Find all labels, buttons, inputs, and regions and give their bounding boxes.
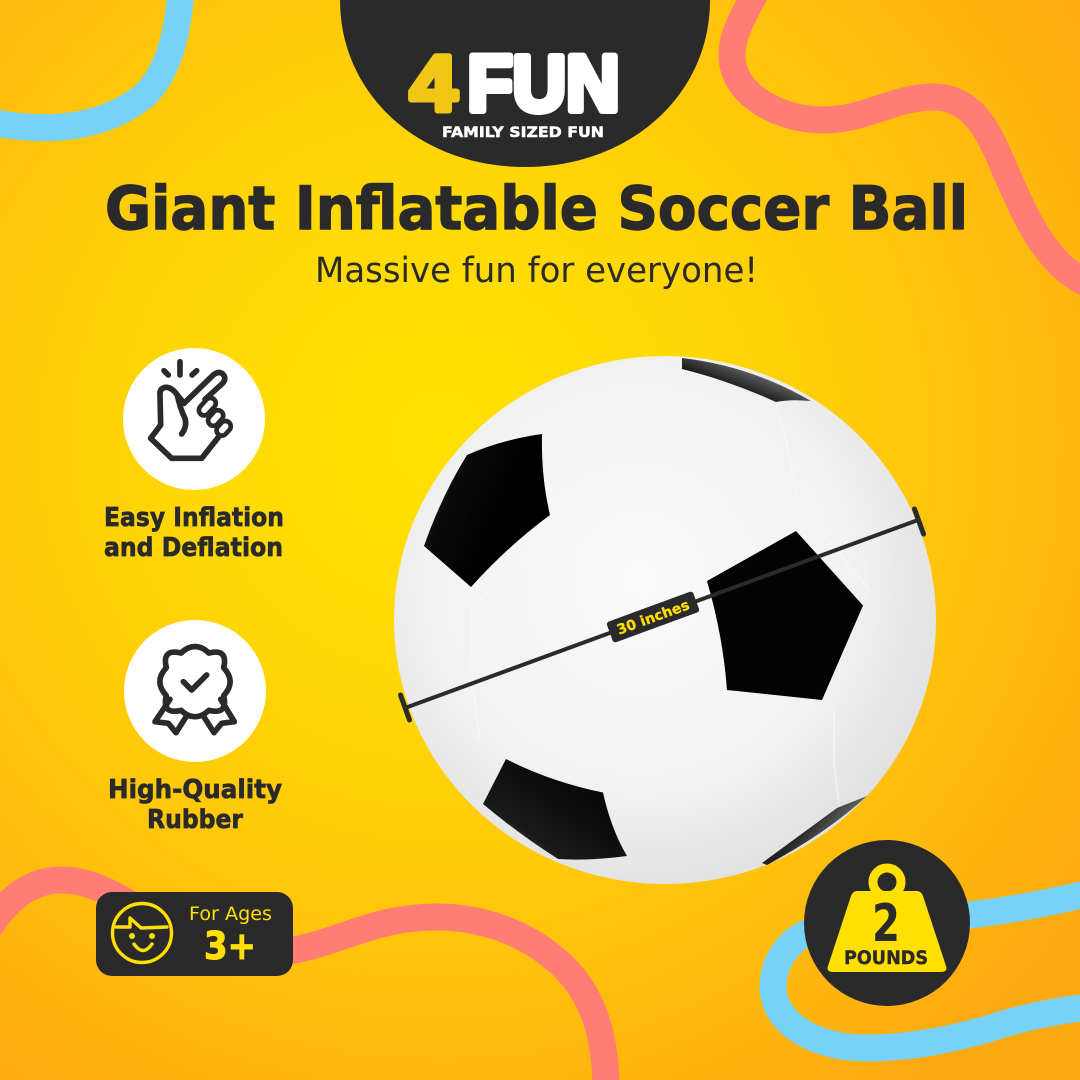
age text: For Ages [189,903,272,925]
ribbon: pink top right [732,0,1080,285]
measure label [606,591,700,643]
logo wordmark [410,38,620,128]
badge: weight [804,840,970,1006]
logo panel [340,0,710,167]
patch: right [707,531,863,700]
ribbon: blue bottom right [773,893,1080,1048]
patch: bottom [483,759,627,860]
weight unit: POUNDS [844,947,928,969]
ribbon: blue top left [0,0,181,128]
icon: snapping hand [123,348,265,490]
logo background [340,0,710,167]
panel seams [471,404,870,805]
icon: kid face [112,904,172,962]
measure label: 30 inches [615,597,692,639]
label: High-Quality [108,775,282,805]
label [104,503,284,563]
feature: easy inflation [104,348,284,563]
ball body [394,356,936,884]
icon: weight [828,868,946,972]
icon: award rosette [124,620,266,762]
badge: for ages: 3+ [204,924,256,968]
label: and Deflation [104,533,283,563]
logo tagline: FAMILY SIZED FUN [442,125,604,141]
patch: lower right [762,796,867,865]
label: Rubber [147,805,243,835]
feature: high quality [108,620,282,835]
label [108,775,282,835]
logo wordmark: 4 [410,38,457,128]
ribbon: pink bottom left [0,880,606,1080]
patch: top [682,358,811,402]
title: Giant Inflatable Soccer Ball [105,174,968,244]
subtitle: Massive fun for everyone! [315,251,758,291]
logo wordmark: FUN [468,38,620,128]
badge: for ages [96,892,293,976]
soccer ball [394,356,936,884]
label: Easy Inflation [104,503,284,533]
weight number: 2 [872,894,900,954]
patch: upper left [424,434,550,587]
measure line [400,509,924,720]
